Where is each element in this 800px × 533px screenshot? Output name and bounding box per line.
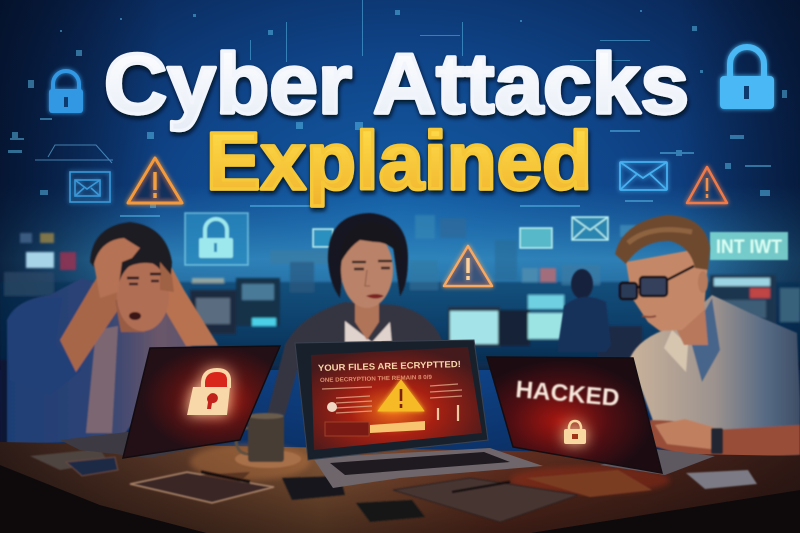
icon: folder outline: [35, 145, 113, 163]
person: woman in centre: [267, 213, 445, 415]
text: ransomware headline: YOUR FILES ARE ECRYPTTED!: [318, 359, 461, 373]
icon: padlock: [187, 370, 230, 415]
heading: Explained: Explained: [206, 116, 592, 207]
icon: envelope left: [70, 172, 110, 202]
person: stressed man on the left: [7, 222, 218, 445]
icon: coffee mug: [235, 413, 301, 468]
background: control room screens: [0, 215, 800, 445]
laptop: red padlock: [60, 346, 280, 458]
icon: background email panels: [313, 217, 608, 248]
icon: lock top right: [720, 47, 774, 109]
icon: warning triangle centre: [444, 246, 492, 286]
text: hacked: HACKED: [514, 376, 620, 412]
laptop: hacked: [487, 357, 715, 475]
icon: background lock panel: [185, 213, 248, 265]
icon: lock top left: [49, 71, 83, 113]
title: [104, 37, 689, 207]
icon: warning triangle right: [687, 167, 727, 203]
desk items: papers and tablet: [30, 449, 757, 522]
icon: envelope right: [620, 162, 667, 190]
banner: glowing text panel: [710, 232, 788, 260]
figure: background silhouette: [558, 269, 611, 352]
icon: small padlock: [564, 421, 586, 444]
banner: glowing text panel: INT IWT: [716, 237, 782, 258]
heading: Cyber Attacks: Cyber Attacks: [104, 37, 689, 132]
laptop: ransomware screen: [295, 340, 543, 488]
person: man with glasses on the right: [615, 215, 800, 460]
icon: warning triangle on screen: [378, 380, 424, 411]
icon: warning triangle left: [128, 158, 182, 203]
desk: [0, 442, 800, 533]
text: ransomware subline: ONE DECRYPTION THE REMAIN 8 0/9: [320, 375, 433, 384]
